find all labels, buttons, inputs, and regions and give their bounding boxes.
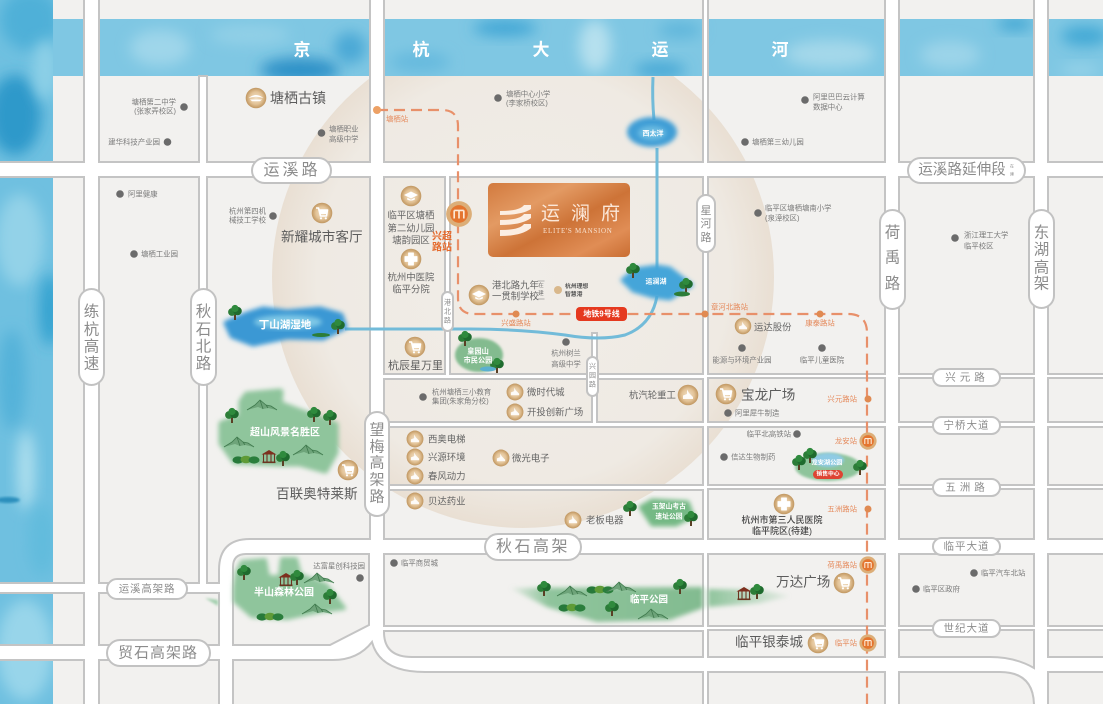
poi: Tangqi No.2 middle school: 塘栖第二中学	[132, 98, 176, 106]
road: Wangmei elevated road: 架	[369, 472, 385, 488]
company: CFMoto	[407, 468, 466, 484]
poi: Tangqi central primary school	[494, 90, 550, 108]
road: Ningqiao avenue: 宁桥大道	[944, 418, 990, 432]
hospital: Hangzhou third people's hospital	[741, 494, 823, 536]
road: Xinghe road: 星	[700, 204, 712, 217]
road: Qiushi elevated: 秋石高架	[496, 538, 570, 556]
poi: Innovent biologics: 信达生物制药	[731, 452, 775, 462]
mall: Wanda plaza: 万达广场	[776, 574, 830, 590]
canal name characters: 运	[652, 40, 668, 60]
company: Weiguang electronics	[493, 450, 550, 466]
road: Wangmei elevated road: 望	[369, 422, 385, 438]
road: Qiushi north road: 路	[196, 354, 212, 372]
logo name: 运澜府	[541, 202, 631, 224]
poi: Tangqi No.2 middle school: (张家弄校区)	[134, 106, 176, 116]
poi: Dafu Xingchuang tech park: 达富星创科技园	[313, 562, 365, 570]
mall: Xinyao city hall: 新耀城市客厅	[281, 228, 363, 244]
road: Shiji avenue: 世纪大道	[944, 622, 990, 634]
station: Kangtai road: 康泰路站	[805, 318, 835, 328]
road: Lianhang expressway: 杭	[84, 320, 99, 338]
station: Tangqi	[373, 106, 409, 124]
road: Yunxi road extension	[908, 158, 1025, 183]
road: Heyu road: 荷	[885, 224, 900, 242]
road: Donghu elevated: 架	[1034, 274, 1049, 292]
company: Hangqi turbine: 杭汽轮重工	[629, 390, 676, 400]
road: Donghu elevated: 湖	[1034, 240, 1049, 258]
mall: Wanda plaza	[776, 573, 854, 593]
poi: Tangqi vocational school	[318, 124, 359, 144]
station: Linping: 临平站	[835, 638, 858, 648]
station: Xingchao road interchange	[432, 201, 472, 254]
metro line 9 badge: 地铁9号线	[583, 308, 620, 318]
road labels	[79, 158, 1054, 666]
poi: Linping coach north station: 临平汽车北站	[981, 568, 1026, 578]
company: CFMoto: 春风动力	[428, 470, 466, 482]
poi: Linping trade city: 临平商贸城	[401, 558, 439, 568]
road: Xingyuan park road: 兴	[589, 362, 596, 370]
school: Gangbei road nine-year school: 在	[538, 281, 544, 289]
poi: Alibaba cloud data centre: 数据中心	[813, 102, 843, 112]
poi: Linping north high-speed rail station: 临平北高铁站	[747, 430, 792, 438]
poi: Tangqi No.3 primary education group: 集团(朱家角分校)	[432, 396, 489, 406]
lake: Xitaiyang	[627, 117, 677, 147]
outlet: Bailian outlets: 百联奥特莱斯	[276, 486, 358, 502]
road: Yunxi road extension: 运溪路延伸段	[918, 161, 1006, 178]
mall: Hangchen Xingwanli	[388, 337, 443, 372]
poi: Tangqi No.3 primary education group: 杭州塘栖三小教育	[432, 388, 491, 396]
company: Yunda	[735, 318, 792, 334]
park: Huangyuanshan citizen park: 市民公园	[464, 356, 492, 364]
company: Betta pharma	[407, 493, 466, 509]
lake: Dingshan wetland	[226, 305, 345, 344]
road: Yunxi road: 运溪路	[263, 161, 321, 179]
mall: Linping Intime city: 临平银泰城	[735, 634, 803, 650]
road: Wangmei elevated road	[365, 412, 389, 516]
station: Wuzhou road: 五洲路站	[827, 504, 858, 514]
poi: Tangnan primary school	[754, 204, 832, 222]
park: Yujiashan archaeological site park: 遗址公园	[655, 512, 683, 520]
hospital: Hangzhou TCM hospital	[388, 249, 435, 294]
road: Yunxi road extension: 在	[1010, 162, 1014, 168]
road: Xingyuan road	[933, 369, 1000, 386]
station: Xingyuan road: 兴元路站	[827, 394, 858, 404]
poi: energy and environment park: 能源与环境产业园	[712, 356, 772, 364]
poi: Hangzhou Lixiang smart harbour: 智慧港	[565, 290, 583, 298]
park: Linping park	[510, 579, 790, 622]
station: Zhanghe north road	[702, 302, 749, 318]
road: Lianhang expressway: 练	[84, 302, 99, 320]
lake: Yunlan	[622, 263, 693, 299]
mall: Baolong plaza	[716, 384, 795, 404]
road: Heyu road	[880, 210, 905, 309]
outlet: Bailian outlets	[276, 460, 358, 502]
poi: Tangqi vocational school: 高级中学	[329, 134, 359, 144]
canal name characters: 大	[532, 40, 550, 60]
station: Xingyuan road	[827, 394, 872, 404]
road: Wangmei elevated road: 高	[369, 454, 385, 472]
poi: Alibaba cloud data centre	[801, 92, 865, 112]
road: Xingyuan park road	[587, 357, 598, 396]
road: Wuzhou road: 五洲路	[945, 480, 989, 494]
station: Xingchao road interchange: 兴超	[432, 230, 452, 242]
school: Gangbei road nine-year school: 港北路九年	[492, 280, 539, 290]
road: Wangmei elevated road: 路	[369, 488, 385, 506]
poi: Hangzhou Lixiang smart harbour: 杭州理想	[565, 282, 588, 290]
road: Wangmei elevated road: 梅	[369, 438, 385, 456]
poi: Linping children's hospital	[800, 344, 845, 364]
road: Maoshi elevated	[107, 640, 210, 666]
station: Xingsheng road: 兴盛路站	[501, 318, 531, 328]
school: Tangqi No.2 kindergarten: 塘韵园区	[392, 234, 430, 246]
canal name characters: 京	[294, 40, 310, 60]
connecting waterways	[345, 77, 657, 338]
poi: Hangzhou No.4 mechanical technical school: 械技工学校	[229, 216, 267, 224]
company: Hangqi turbine	[629, 385, 698, 405]
road: Gangbei road: 港	[444, 298, 451, 306]
road: Qiushi north road: 石	[196, 322, 211, 338]
road: Heyu road: 禹	[885, 248, 900, 266]
road: Qiushi elevated	[485, 534, 581, 560]
road: Xinghe road: 路	[700, 231, 712, 244]
hospital: Hangzhou third people's hospital: 临平院区(待建)	[752, 525, 812, 536]
poi: Shulan high school: 高级中学	[551, 360, 581, 368]
mall: Baolong plaza: 宝龙广场	[741, 388, 795, 402]
mall: Xinyao city hall	[281, 203, 363, 244]
company: Robam appliances: 老板电器	[586, 514, 624, 526]
poi: Tangqi No.3 kindergarten: 塘栖第三幼儿园	[752, 138, 804, 146]
road: Xinghe road: 河	[700, 217, 712, 230]
hospital: Hangzhou TCM hospital: 临平分院	[392, 284, 430, 294]
poi: Ali health: 阿里健康	[128, 190, 158, 198]
hospital: Hangzhou third people's hospital: 杭州市第三人民医院	[741, 514, 823, 525]
road: Yunxi elevated	[107, 579, 187, 599]
station: Long'an: 龙安站	[835, 436, 858, 446]
park: Chaoshan scenic area	[222, 392, 337, 470]
poi: Linping children's hospital: 临平儿童医院	[800, 356, 845, 364]
poi: Jianhua tech park: 建华科技产业园	[108, 138, 160, 146]
company: Robam appliances	[565, 512, 624, 528]
poi: Shulan high school: 杭州树兰	[551, 348, 581, 358]
poi: Tangqi central primary school: (李家桥校区)	[506, 98, 548, 108]
points of interest: small dots	[108, 90, 1026, 594]
school: Gangbei road nine-year school: 一贯制学校	[492, 290, 540, 302]
road: Xingyuan road: 兴元路	[945, 370, 989, 384]
canal name characters: 杭	[412, 40, 430, 60]
company: Xingyuan environment	[407, 449, 466, 465]
company: Weishidai city	[507, 384, 565, 400]
company: Weishidai city: 微时代城	[527, 386, 565, 398]
station: Kangtai road	[805, 310, 835, 328]
company: Xiao elevator	[407, 431, 466, 447]
park: Yujiashan archaeological site park	[623, 500, 698, 526]
poi: Hangzhou No.4 mechanical technical school	[229, 206, 277, 224]
station: Long'an	[835, 432, 877, 450]
park: Linping park: 临平公园	[630, 594, 668, 606]
lake: Xitaiyang: 西太洋	[642, 128, 664, 138]
park: Banshan forest park	[205, 559, 344, 621]
road: Gangbei road: 路	[444, 316, 451, 324]
poi: Alibaba cloud data centre: 阿里巴巴云计算	[813, 92, 865, 102]
landmark: Tangqi old town: 塘栖古镇	[270, 90, 326, 106]
school: Tangqi No.2 kindergarten	[388, 186, 434, 246]
station: Wuzhou road	[827, 504, 872, 514]
road: Wuzhou road	[933, 479, 1000, 496]
poi: Hangzhou Lixiang smart harbour	[554, 282, 588, 298]
poi: Tangqi No.2 middle school	[132, 98, 188, 116]
road: Xingyuan park road: 园	[589, 372, 596, 380]
road: Gangbei road	[442, 292, 453, 331]
logo English subtitle: ELITE'S MANSION	[543, 227, 613, 235]
school: Gangbei road nine-year school: 建	[538, 289, 544, 297]
poi: energy and environment park	[712, 344, 772, 364]
road: Yunxi road extension: 建	[1010, 170, 1014, 176]
park: Chaoshan scenic area: 超山风景名胜区	[250, 426, 320, 438]
poi: Tangqi central primary school: 塘栖中心小学	[506, 90, 550, 98]
metro stations	[373, 106, 877, 652]
company: Xiao elevator: 西奥电梯	[428, 434, 466, 444]
road: Xingyuan park road: 路	[589, 380, 596, 388]
station: Zhanghe north road: 章河北路站	[711, 302, 749, 312]
poi: Tangnan primary school: (泉漳校区)	[765, 214, 800, 222]
station: Heyu road	[827, 556, 877, 574]
station: Linping	[835, 634, 877, 652]
poi: Shulan high school	[551, 338, 581, 368]
five kilometre circle highlight	[272, 26, 774, 528]
poi: Tangqi No.3 primary education group	[419, 388, 491, 406]
school: Gangbei road nine-year school	[469, 280, 544, 305]
canal name characters	[294, 40, 788, 58]
road: Linping avenue: 临平大道	[944, 540, 990, 552]
park: Longan lake with sales centre	[792, 448, 867, 481]
road: Heyu road: 路	[885, 274, 901, 292]
road: Yunxi elevated: 运溪高架路	[119, 582, 175, 595]
company: Yunda: 运达股份	[754, 322, 792, 332]
park: Huangyuanshan citizen park	[455, 331, 504, 373]
road: Shiji avenue	[933, 620, 1000, 637]
canal name characters: 河	[772, 40, 788, 60]
company: Kaitou innovation plaza	[507, 404, 583, 420]
project logo card	[488, 183, 631, 257]
poi: Tangqi industrial park: 塘栖工业园	[141, 250, 178, 258]
lake: Dingshan wetland: 丁山湖湿地	[259, 318, 312, 331]
road: Gangbei road: 北	[444, 308, 451, 316]
hospital: Hangzhou TCM hospital: 杭州中医院	[388, 272, 435, 282]
park: Longan lake with sales centre: 龙安湖公园	[812, 458, 842, 466]
road: Maoshi elevated: 贸石高架路	[118, 644, 198, 662]
road: Xinghe road	[697, 195, 715, 252]
company: Betta pharma: 贝达药业	[428, 496, 466, 506]
road: Linping avenue	[933, 538, 1000, 555]
lake: Yunlan: 运澜湖	[646, 276, 666, 286]
road: Donghu elevated: 东	[1034, 224, 1049, 242]
park: Banshan forest park: 半山森林公园	[254, 586, 314, 598]
school: Tangqi No.2 kindergarten: 临平区塘栖	[388, 210, 434, 220]
park: Longan lake with sales centre: 销售中心	[816, 470, 840, 478]
poi: Zhejiang Sci-Tech University	[951, 230, 1008, 250]
poi: Tangqi vocational school: 塘栖职业	[329, 124, 359, 134]
canal band: Beijing-Hangzhou Grand Canal	[53, 19, 1103, 76]
commerce, education, medical and enterprise icons	[276, 186, 854, 653]
road: Qiushi north road	[191, 289, 216, 385]
road: Lianhang expressway: 速	[84, 354, 99, 372]
metro line 9 dashed route	[377, 110, 867, 704]
company: Kaitou innovation plaza: 开投创新广场	[527, 406, 583, 418]
station: Heyu road: 荷禹路站	[827, 560, 858, 570]
road: Qiushi north road: 北	[196, 338, 212, 356]
river: west water body	[0, 0, 53, 704]
poi: Tangnan primary school: 临平区塘栖塘南小学	[765, 204, 832, 212]
station: Xingsheng road	[501, 310, 531, 328]
road: Qiushi north road: 秋	[196, 302, 212, 320]
station: Tangqi: 塘栖站	[386, 114, 409, 124]
mall: Hangchen Xingwanli: 杭辰星万里	[388, 358, 443, 372]
school: Tangqi No.2 kindergarten: 第二幼儿园	[388, 222, 434, 234]
poi: Alibaba Xiniu manufacturing: 阿里犀牛制造	[735, 408, 780, 418]
company: Xingyuan environment: 兴源环境	[428, 452, 466, 462]
logo mark stripes	[500, 205, 531, 236]
station: Xingchao road interchange: 路站	[432, 240, 452, 254]
road: Donghu elevated	[1029, 210, 1054, 308]
road: Yunxi road	[252, 158, 331, 183]
park: Yujiashan archaeological site park: 玉架山考古	[652, 502, 686, 510]
mall: Linping Intime city	[735, 633, 828, 653]
road: Lianhang expressway: 高	[84, 338, 99, 356]
poi: Hangzhou No.4 mechanical technical school: 杭州第四机	[229, 206, 267, 216]
landmark: Tangqi old town	[246, 88, 326, 108]
road: Lianhang expressway	[79, 289, 104, 385]
road: Ningqiao avenue	[933, 417, 1000, 434]
poi: Linping district government: 临平区政府	[923, 584, 961, 594]
poi: Zhejiang Sci-Tech University: 临平校区	[964, 242, 994, 250]
poi: Dafu Xingchuang tech park	[313, 562, 365, 582]
company: Weiguang electronics: 微光电子	[512, 452, 550, 464]
metro line 9 badge	[576, 307, 627, 321]
road: Donghu elevated: 高	[1034, 258, 1049, 276]
park: Huangyuanshan citizen park: 皇园山	[467, 346, 489, 356]
poi: Zhejiang Sci-Tech University: 浙江理工大学	[964, 230, 1008, 240]
